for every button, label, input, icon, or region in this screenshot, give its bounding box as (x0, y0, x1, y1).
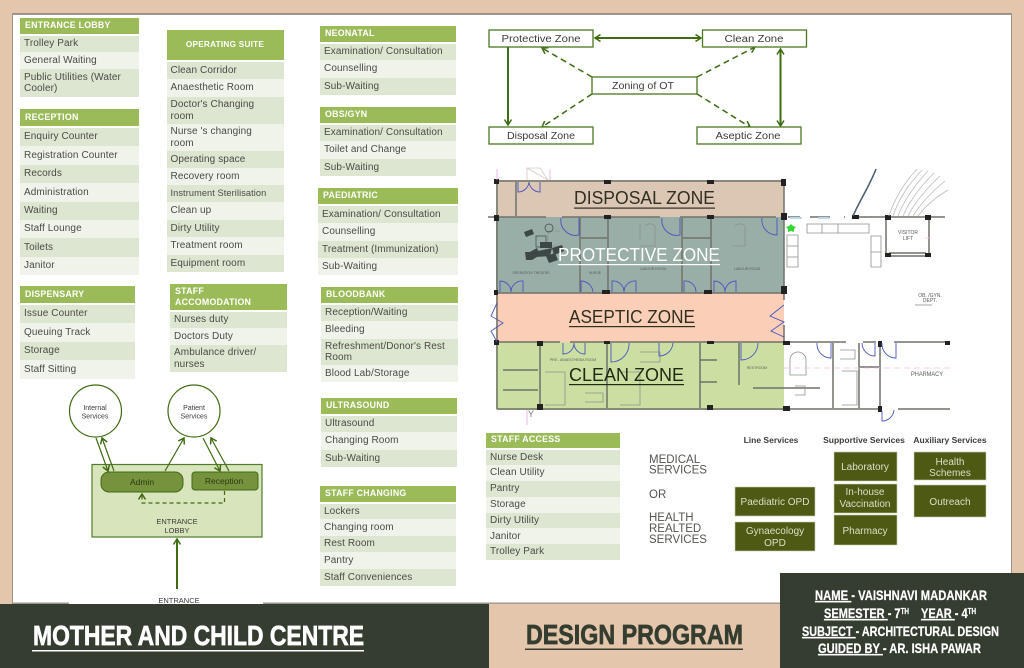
rows: staff accomodation: Doctors Duty (174, 331, 233, 342)
plan labels: NURSE (589, 271, 602, 275)
rows: entrance lobby: Trolley Park (24, 38, 78, 49)
heading: reception (20, 109, 139, 126)
table: paediatric (318, 188, 458, 275)
rows: operating suite: Operating space (170, 154, 245, 165)
plan labels: PHARMACY (911, 371, 944, 378)
lobby and entrance labels: ENTRANCE (158, 596, 200, 605)
entrance flow diagram (70, 385, 262, 605)
rows: operating suite: Treatment room (170, 240, 243, 251)
plan furniture and right wing (545, 224, 881, 405)
rows: operating suite (167, 62, 284, 272)
rows: staff accomodation: Nurses duty (174, 314, 228, 325)
table: entrance lobby (20, 18, 139, 97)
table: bloodbank (321, 287, 458, 382)
table: staff changing (320, 486, 456, 586)
heading: dispensary (20, 286, 135, 303)
operating table cluster (524, 229, 564, 263)
plan labels: VISITOR (898, 230, 918, 236)
rows: obs/gyn: Examination/ Consultation (324, 127, 443, 138)
service circles: Services (181, 414, 208, 420)
rows: dispensary: Issue Counter (24, 308, 88, 319)
rows: ultrasound: Changing Room (325, 435, 399, 446)
rows: entrance lobby (20, 36, 139, 97)
rows: staff changing: Staff Conveniences (324, 572, 412, 583)
rows: operating suite: Anaesthetic Room (170, 82, 254, 93)
rows: paediatric: Treatment (Immunization) (322, 244, 439, 255)
heading: paediatric (318, 188, 458, 204)
plan labels: DEPT. (923, 298, 937, 304)
rows: paediatric: Counselling (322, 226, 375, 237)
heading: dispensary: DISPENSARY (25, 289, 84, 299)
rows: reception (20, 128, 139, 275)
service column headings: Line Services (744, 435, 799, 445)
rows: reception: Staff Lounge (24, 223, 82, 234)
heading: staff accomodation (170, 284, 287, 310)
rows: staff changing: Pantry (324, 555, 354, 566)
rows: paediatric: Sub-Waiting (322, 261, 377, 272)
rows: staff changing (320, 504, 456, 586)
zoning of OT diagram: Zoning of OT (612, 81, 674, 92)
design program band (489, 603, 781, 668)
student details block: GUIDED BY - AR. ISHA PAWAR (818, 640, 981, 656)
zone fills (496, 180, 784, 410)
rows: obs/gyn: Toilet and Change (324, 144, 406, 155)
zoning of OT diagram: Aseptic Zone (716, 131, 781, 142)
plan labels: LABOUR ROOM (734, 267, 760, 271)
services chart: Vaccination (840, 499, 890, 510)
heading: obs/gyn: OBS/GYN (325, 109, 367, 119)
heading: staff changing: STAFF CHANGING (325, 488, 407, 498)
medical services caption: HEALTH (649, 512, 694, 524)
rows: staff access: Dirty Utility (490, 515, 539, 526)
rows: bloodbank (321, 305, 458, 382)
rows: staff access: Janitor (490, 531, 521, 542)
rows: entrance lobby: General Waiting (24, 55, 97, 66)
rows: neonatal: Examination/ Consultation (324, 46, 443, 57)
rows: obs/gyn: Sub-Waiting (324, 162, 379, 173)
title band (0, 604, 489, 668)
rows: entrance lobby: Public Utilities (Water (24, 72, 121, 82)
zoning of OT diagram: Protective Zone (502, 34, 581, 45)
heading: entrance lobby (20, 18, 139, 34)
plan labels: OB. /GYN. (918, 293, 942, 299)
medical services caption: SERVICES (649, 534, 707, 546)
entrance lobby box (92, 464, 262, 537)
services chart: Laboratory (841, 462, 889, 473)
service column headings: Auxiliary Services (913, 435, 987, 445)
rows: reception: Waiting (24, 205, 58, 216)
reception block: Reception (205, 476, 243, 486)
rows: staff access: Clean Utility (490, 467, 545, 478)
table: operating suite (167, 30, 284, 272)
zone labels: PROTECTIVE ZONE (558, 244, 720, 265)
lobby and entrance labels: ENTRANCE (156, 517, 198, 526)
zone labels (558, 187, 720, 385)
rows: operating suite: room (170, 110, 194, 122)
heading: neonatal (320, 26, 456, 42)
plan labels (512, 230, 944, 419)
rows: reception: Janitor (24, 260, 55, 271)
medical services caption: OR (649, 489, 666, 501)
student details block: SEMESTER - 7 (824, 605, 904, 621)
rows: bloodbank: Refreshment/Donor's Rest (325, 340, 445, 352)
plan labels: LIFT (903, 236, 913, 242)
medical services caption: REALTED (649, 523, 701, 535)
zoning of OT diagram: Clean Zone (724, 34, 784, 45)
lobby and entrance labels: LOBBY (164, 526, 190, 535)
rows: operating suite: Equipment room (170, 258, 245, 269)
zone labels: ASEPTIC ZONE (569, 306, 695, 327)
services chart: Paediatric OPD (741, 497, 809, 508)
services chart: Gynaecology (746, 526, 804, 537)
table: staff access (486, 433, 620, 560)
student details block: TH (901, 607, 909, 616)
heading: neonatal: NEONATAL (325, 28, 375, 38)
zoning of OT diagram (489, 30, 806, 144)
heading: reception: RECEPTION (25, 112, 79, 122)
rows: operating suite: Dirty Utility (170, 223, 220, 234)
rows: bloodbank: Blood Lab/Storage (325, 368, 410, 379)
rows: reception: Enquiry Counter (24, 131, 98, 142)
services chart: Schemes (929, 468, 971, 479)
rows: reception: Toilets (24, 242, 53, 253)
heading: ultrasound: ULTRASOUND (326, 400, 389, 410)
plan labels: Y (528, 409, 534, 419)
rows: ultrasound: Ultrasound (325, 418, 374, 429)
heading: bloodbank (321, 287, 458, 303)
reception block (192, 472, 258, 490)
rows: operating suite: Clean Corridor (170, 65, 237, 76)
plan labels: OPERATION THEATRE (512, 271, 550, 275)
rows: staff accomodation: Ambulance driver/ (174, 347, 256, 358)
rows: reception: Administration (24, 187, 89, 198)
rows: neonatal: Counselling (324, 63, 377, 74)
heading: paediatric: PAEDIATRIC (323, 190, 378, 200)
plan walls (488, 181, 950, 409)
zone labels: DISPOSAL ZONE (574, 187, 715, 208)
admin block: Admin (130, 477, 154, 487)
rows: staff access (486, 450, 620, 560)
services chart: Pharmacy (842, 526, 888, 537)
services chart: Outreach (929, 497, 971, 508)
table: neonatal (320, 26, 456, 95)
table: obs/gyn (320, 107, 456, 176)
plan columns (494, 179, 950, 412)
service column headings (744, 435, 987, 445)
rows: paediatric: Examination/ Consultation (322, 209, 441, 220)
rows: reception: Records (24, 168, 62, 179)
rows: operating suite: Clean up (170, 205, 211, 216)
service boxes (735, 452, 986, 551)
plan labels: LABOUR ROOM (640, 267, 666, 271)
heading: obs/gyn (320, 107, 456, 123)
service circles: Services (82, 414, 109, 420)
rows: ultrasound (321, 416, 457, 467)
rows: dispensary: Staff Sitting (24, 364, 76, 375)
heading: bloodbank: BLOODBANK (326, 289, 385, 299)
heading: staff access (486, 432, 620, 448)
service column headings: Supportive Services (823, 435, 905, 445)
rows: operating suite: room (170, 138, 194, 148)
rows: dispensary (20, 305, 135, 379)
table: ultrasound (321, 398, 457, 467)
heading: staff access: STAFF ACCESS (491, 434, 560, 444)
service circles: Patient (183, 405, 205, 412)
rows: staff accomodation (170, 312, 287, 372)
student details block: NAME - VAISHNAVI MADANKAR (815, 587, 987, 603)
rows: bloodbank: Room (325, 352, 352, 363)
medical services caption: MEDICAL (649, 454, 701, 466)
rows: staff changing: Rest Room (324, 538, 375, 549)
plan labels: RESTROOM (747, 366, 767, 370)
table: staff accomodation (170, 284, 287, 372)
table: dispensary (20, 286, 135, 379)
rows: staff changing: Changing room (324, 522, 394, 533)
title band: MOTHER AND CHILD CENTRE (33, 620, 364, 651)
rows: operating suite: Instrument Sterilisation (170, 188, 266, 198)
student details block: YEAR - 4 (921, 605, 971, 621)
heading: staff accomodation: STAFF (175, 286, 204, 296)
medical services caption: SERVICES (649, 464, 707, 476)
flow arrows (96, 438, 229, 589)
zone labels: CLEAN ZONE (569, 364, 684, 385)
services chart (649, 435, 987, 551)
rows: dispensary: Storage (24, 345, 60, 356)
rows: neonatal (320, 44, 456, 95)
medical services caption (649, 454, 707, 546)
rows: bloodbank: Reception/Waiting (325, 307, 407, 318)
service circles (70, 385, 220, 437)
rows: ultrasound: Sub-Waiting (325, 453, 380, 464)
rows: staff access: Trolley Park (490, 546, 544, 557)
design program band: DESIGN PROGRAM (526, 619, 743, 650)
curved entrance arcs (497, 168, 950, 425)
rows: reception: Registration Counter (24, 150, 118, 161)
rows: neonatal: Sub-Waiting (324, 81, 379, 92)
services chart: OPD (764, 538, 786, 549)
services chart: In-house (846, 487, 885, 498)
zoning of OT diagram: Disposal Zone (507, 131, 575, 142)
rows: paediatric (318, 206, 458, 275)
rows: staff access: Storage (490, 499, 526, 510)
heading: ultrasound (321, 398, 457, 414)
plan labels: PRE - ANAESTHESIA ROOM (550, 358, 596, 362)
rows: obs/gyn (320, 125, 456, 176)
rows: staff accomodation: nurses (174, 358, 205, 370)
heading: operating suite: OPERATING SUITE (186, 40, 264, 49)
plan doors (491, 182, 896, 421)
lobby and entrance labels (156, 517, 200, 605)
rows: entrance lobby: Cooler) (24, 83, 58, 94)
rows: dispensary: Queuing Track (24, 327, 90, 338)
rows: staff changing: Lockers (324, 506, 360, 517)
rows: bloodbank: Bleeding (325, 324, 365, 335)
rows: staff access: Nurse Desk (490, 452, 543, 463)
heading: operating suite (166, 30, 284, 60)
admin block (101, 472, 183, 492)
table: reception (20, 109, 139, 275)
service circles: Internal (83, 405, 107, 412)
floor plan with zones (488, 168, 950, 425)
heading: staff changing (320, 486, 456, 502)
heading: entrance lobby: ENTRANCE LOBBY (25, 20, 111, 30)
rows: operating suite: Doctor's Changing (170, 99, 254, 110)
rows: operating suite: Nurse 's changing (170, 126, 252, 137)
rows: operating suite: Recovery room (170, 171, 240, 182)
rows: staff access: Pantry (490, 483, 520, 494)
student details block (780, 573, 1024, 668)
heading: staff accomodation: ACCOMODATION (175, 297, 251, 307)
student details block: TH (968, 607, 976, 616)
stair marker (786, 224, 796, 232)
services chart: Health (936, 457, 964, 468)
